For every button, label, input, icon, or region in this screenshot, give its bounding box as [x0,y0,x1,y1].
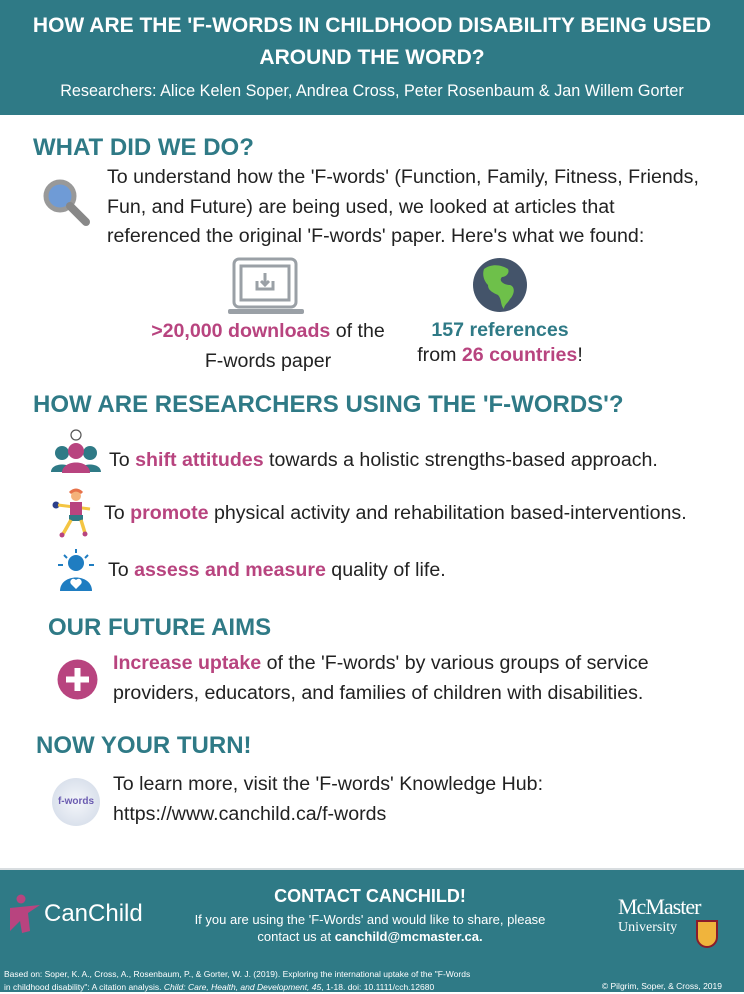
stat: references [417,319,583,366]
contact text: contact us at canchild@mcmaster.ca. [257,929,483,944]
heading: what did we do: WHAT DID WE DO? [33,134,254,161]
intro text: referenced the original 'F-words' paper. Here's what we found: [107,225,644,247]
contact text: If you are using the 'F-Words' and would like to share, please [195,912,545,927]
citation: in childhood disability": A citation analysis. Child: Care, Health, and Development, 45, 1-18. doi: 10.1111/cch.12680 [4,982,434,992]
title [33,14,711,69]
logo: CanChild: CanChild [44,900,143,927]
stat: references: 157 references [431,319,569,341]
logo: McMaster: McMaster [618,894,700,919]
row 1 text: To shift attitudes towards a holistic strengths-based approach. [109,449,658,471]
logo: McMaster: University [618,920,677,935]
copyright: © Pilgrim, Soper, & Cross, 2019 [602,981,722,991]
future aims text [113,652,649,704]
icon: laptop download [228,258,304,314]
future aims text: Increase uptake of the 'F-words' by various groups of service [113,652,649,674]
stat: references: from 26 countries! [417,344,583,366]
icon: people with bulb [51,429,101,473]
heading: future aims: OUR FUTURE AIMS [48,614,271,641]
future aims text: providers, educators, and families of children with disabilities. [113,682,643,704]
intro text: Fun, and Future) are being used, we looked at articles that [107,196,615,218]
contact text [195,886,545,944]
icon: f-words logo: f-words [58,796,94,807]
icon: plus circle [58,660,98,700]
heading: how are researchers: HOW ARE RESEARCHERS USING THE 'F-WORDS'? [33,391,624,418]
stat: downloads: F-words paper [205,350,331,372]
intro text: To understand how the 'F-words' (Function, Family, Fitness, Friends, [107,166,699,188]
intro text [107,166,699,247]
now your turn text: https://www.canchild.ca/f-words [113,802,386,824]
row 2 text: To promote physical activity and rehabilitation based-interventions. [104,502,687,524]
stat: downloads: >20,000 downloads of the [151,320,385,342]
footer [0,868,744,992]
header banner [0,0,744,115]
now your turn text: To learn more, visit the 'F-words' Knowledge Hub: [113,773,543,795]
icon: athlete [52,488,90,538]
logo: McMaster [618,894,718,948]
icon: globe [473,258,527,312]
title: AROUND THE WORD? [259,46,485,69]
now your turn text [113,773,543,824]
researchers: Researchers: Alice Kelen Soper, Andrea Cross, Peter Rosenbaum & Jan Willem Gorter [60,82,684,100]
heading: now your turn: NOW YOUR TURN! [36,732,252,759]
icon: person with heart [58,549,94,591]
stat: downloads [151,320,385,372]
citation [4,969,470,992]
logo: CanChild [10,894,143,933]
citation: Based on: Soper, K. A., Cross, A., Rosenbaum, P., & Gorter, W. J. (2019). Exploring the international uptake of the "F-Words [4,969,470,979]
row 3 text: To assess and measure quality of life. [108,559,446,581]
icon: f-words logo [52,778,100,826]
icon: magnifier [44,180,90,226]
title: HOW ARE THE 'F-WORDS IN CHILDHOOD DISABILITY BEING USED [33,14,711,37]
contact text: CONTACT CANCHILD! [274,886,466,906]
